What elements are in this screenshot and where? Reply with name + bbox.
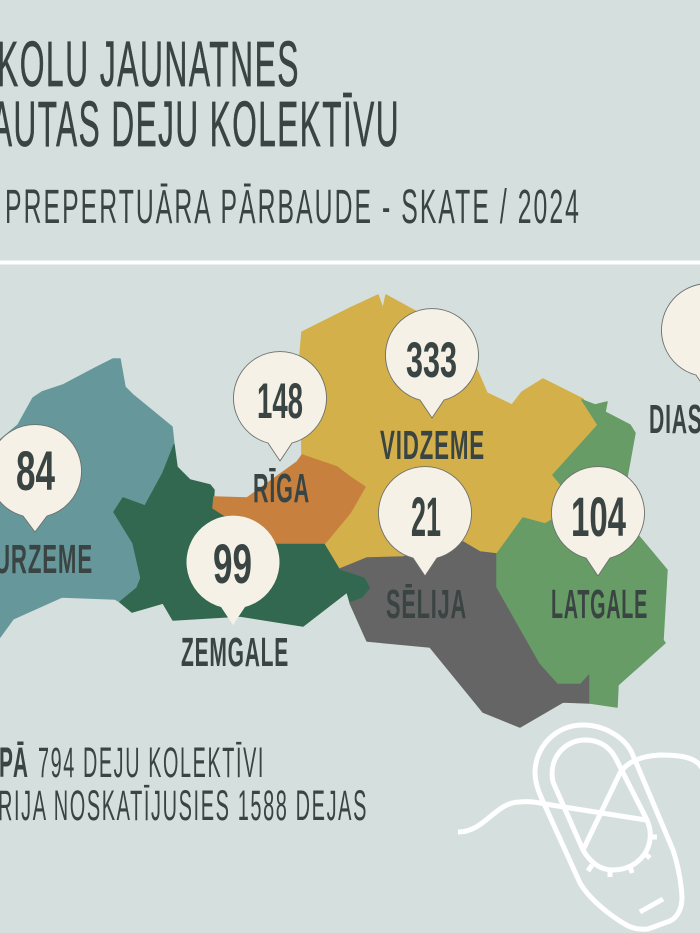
region: Latgale — [497, 400, 667, 707]
pin: Zemgale 99: 99 — [213, 532, 252, 595]
totals text — [0, 739, 368, 830]
icon: skating track with dance pattern — [458, 725, 700, 929]
title — [0, 28, 400, 160]
region: Vidzeme — [300, 295, 598, 568]
region: Sēlija — [340, 542, 590, 727]
region label: Vidzeme: VIDZEME — [380, 422, 485, 468]
pin: Latgale 104 — [552, 467, 644, 576]
pin: Rīga 148: 148 — [257, 373, 303, 429]
totals text: 794 DEJU KOLEKTĪVI — [38, 739, 265, 787]
region: Kurzeme — [0, 359, 174, 637]
pin: Kurzeme 84 — [0, 425, 82, 532]
region: Rīga — [213, 455, 365, 543]
pin: Zemgale 99 — [186, 516, 280, 625]
region label: Zemgale: ZEMGALE — [181, 629, 289, 675]
pin: Diaspora — [661, 284, 700, 393]
pin: Rīga 148 — [234, 352, 326, 461]
pin: Vidzeme 333 — [386, 309, 479, 418]
pin: Kurzeme 84: 84 — [16, 439, 55, 502]
pin: Sēlija 21: 21 — [411, 485, 441, 548]
region: Zemgale — [114, 445, 371, 626]
pin: Latgale 104: 104 — [571, 485, 626, 548]
region label: Rīga: RĪGA — [253, 465, 310, 511]
region label: Sēlija: SĒLIJA — [386, 581, 467, 627]
totals text: PĀ — [0, 739, 28, 787]
pin: Vidzeme 333: 333 — [406, 332, 457, 388]
map of regions — [0, 295, 667, 727]
title: KOLU JAUNATNES — [0, 28, 300, 100]
pin: Sēlija 21 — [378, 467, 472, 576]
